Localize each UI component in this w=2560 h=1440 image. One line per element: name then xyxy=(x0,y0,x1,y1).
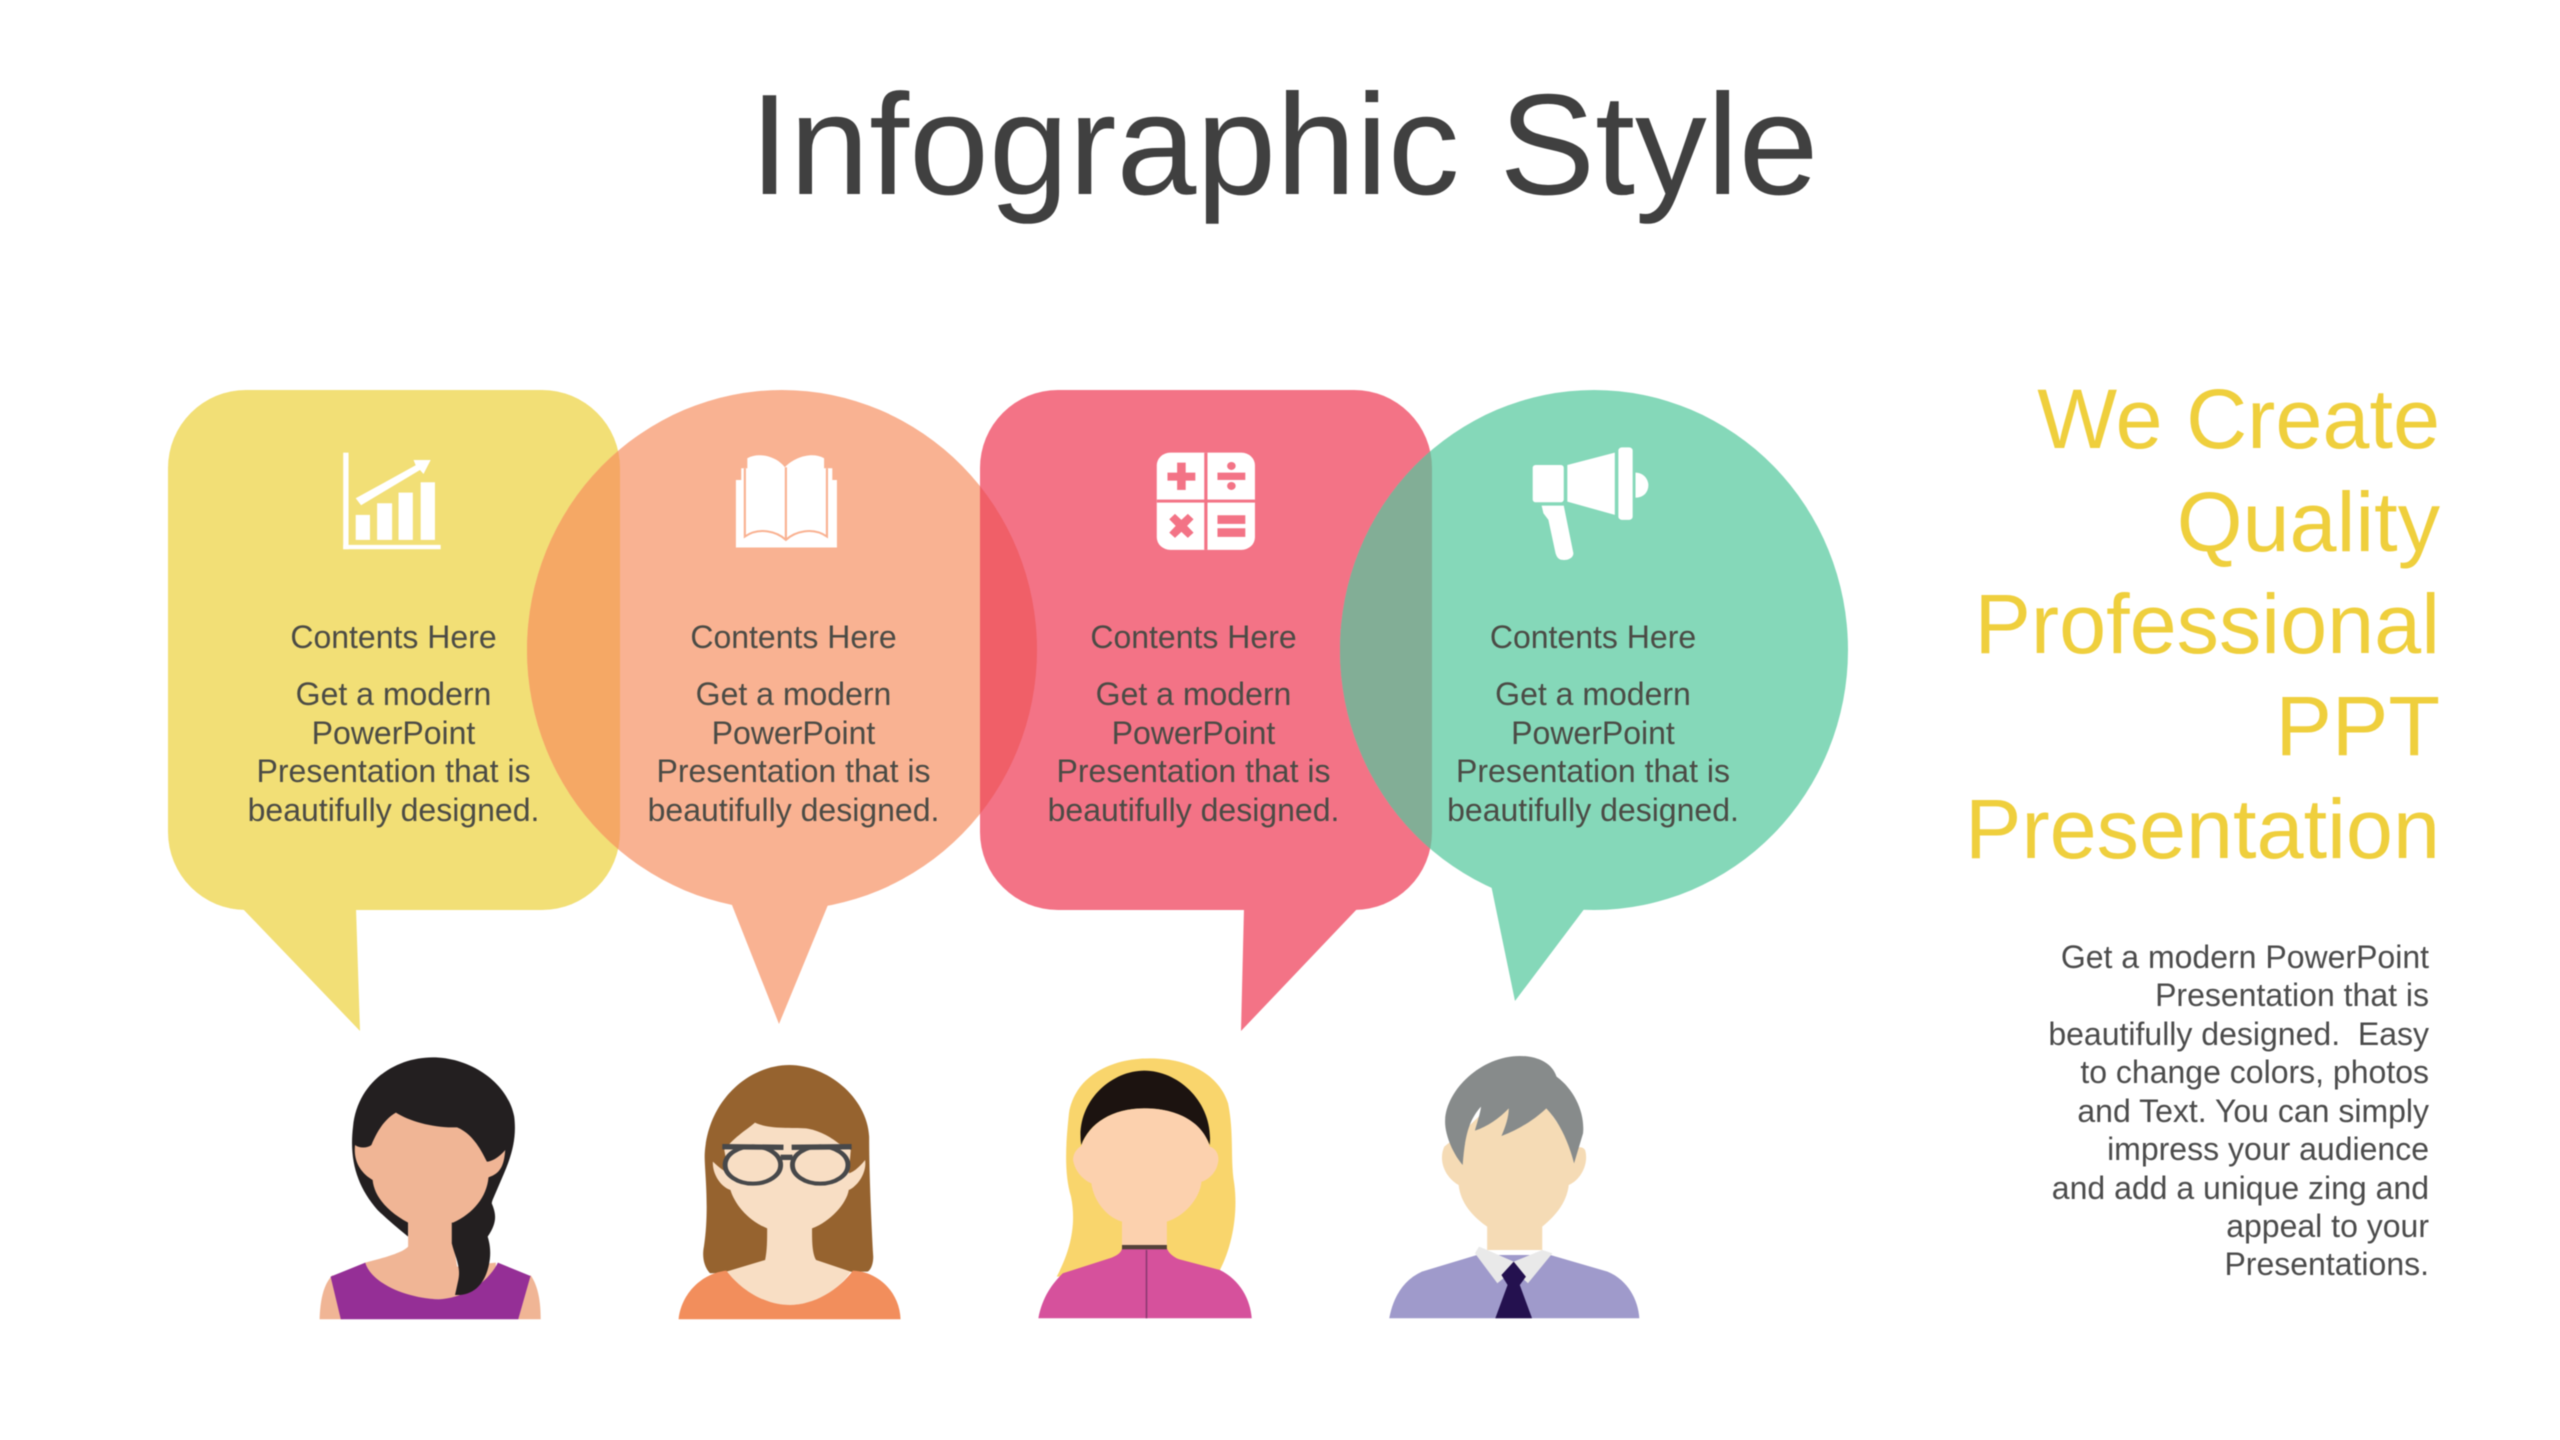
panel: peach speech bubble xyxy=(527,390,1037,1024)
text block: peach bubble: PowerPoint xyxy=(712,715,875,751)
icon: bar chart with rising arrow xyxy=(343,453,441,549)
text block: pink bubble: PowerPoint xyxy=(1112,715,1275,751)
overlap: yellow and peach xyxy=(526,451,620,849)
text block: peach bubble xyxy=(648,619,939,828)
avatar: blonde woman with headband xyxy=(1038,1058,1252,1318)
heading: right column xyxy=(1965,371,2441,876)
text block: yellow bubble: Get a modern xyxy=(296,676,491,712)
text block: yellow bubble: Contents Here xyxy=(290,619,497,655)
text block: peach bubble: Contents Here xyxy=(690,619,897,655)
text block: green bubble: Contents Here xyxy=(1490,619,1696,655)
text block: right column description: and Text. You can simply xyxy=(2077,1093,2429,1129)
text block: pink bubble: Contents Here xyxy=(1090,619,1297,655)
text block: right column description: Get a modern PowerPoint xyxy=(2061,939,2429,975)
text block: right column description: to change colors, photos xyxy=(2080,1054,2429,1090)
overlap: peach and pink xyxy=(980,486,1038,814)
text block: green bubble: PowerPoint xyxy=(1511,715,1675,751)
text block: yellow bubble: beautifully designed. xyxy=(248,792,539,828)
heading: right column: Presentation xyxy=(1965,781,2440,876)
text block: yellow bubble: PowerPoint xyxy=(312,715,475,751)
icon: megaphone xyxy=(1533,447,1648,560)
avatar: woman with black braid xyxy=(320,1057,541,1319)
text block: pink bubble xyxy=(1048,619,1339,828)
avatar: man with grey hair and tie xyxy=(1389,1056,1639,1318)
panel: yellow speech bubble xyxy=(168,390,620,1031)
title: Infographic Style xyxy=(750,65,1818,225)
heading: right column: Quality xyxy=(2177,474,2441,569)
text block: pink bubble: Presentation that is xyxy=(1057,753,1330,789)
text block: right column description: beautifully designed. Easy xyxy=(2048,1016,2429,1052)
text block: right column description: Presentation that is xyxy=(2155,977,2429,1013)
text block: green bubble xyxy=(1447,619,1739,828)
text block: peach bubble: beautifully designed. xyxy=(648,792,939,828)
icon: open book xyxy=(736,455,837,548)
infographic canvas xyxy=(167,89,2440,1320)
heading: right column: PPT xyxy=(2275,678,2440,773)
heading: right column: Professional xyxy=(1974,576,2440,671)
text block: right column description: impress your audience xyxy=(2107,1131,2429,1167)
heading: right column: We Create xyxy=(2037,371,2440,466)
overlap: pink and green xyxy=(1340,452,1432,848)
text block: green bubble: Presentation that is xyxy=(1456,753,1730,789)
text block: right column description: appeal to your xyxy=(2226,1208,2429,1244)
text block: pink bubble: Get a modern xyxy=(1096,676,1291,712)
text block: green bubble: beautifully designed. xyxy=(1447,792,1739,828)
text block: right column description xyxy=(2048,939,2429,1282)
panel: pink speech bubble xyxy=(980,390,1432,1031)
panel: green speech bubble xyxy=(1340,390,1848,1001)
text block: right column description: Presentations. xyxy=(2224,1246,2429,1282)
text block: peach bubble: Get a modern xyxy=(696,676,891,712)
text block: right column description: and add a unique zing and xyxy=(2052,1170,2429,1206)
text block: pink bubble: beautifully designed. xyxy=(1048,792,1339,828)
icon: calculator xyxy=(1157,453,1255,550)
text block: yellow bubble xyxy=(248,619,539,828)
text block: green bubble: Get a modern xyxy=(1495,676,1691,712)
avatar: woman with glasses xyxy=(679,1065,901,1319)
text block: yellow bubble: Presentation that is xyxy=(257,753,530,789)
text block: peach bubble: Presentation that is xyxy=(657,753,930,789)
